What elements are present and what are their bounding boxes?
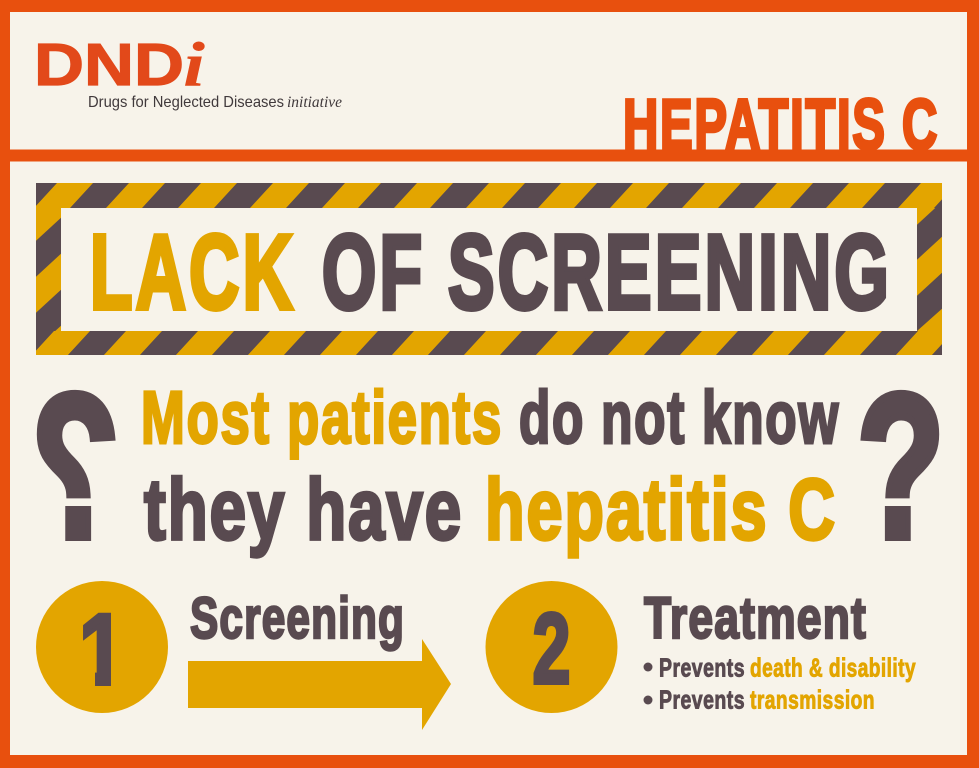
step 2 circle: [486, 581, 618, 713]
logo wordmark: [34, 28, 205, 100]
step 1 circle: [36, 581, 168, 713]
bullet: prevents transmission: transmission: [750, 684, 875, 714]
bullet: prevents transmission: Prevents: [659, 684, 745, 714]
step 2 label: Treatment: Treatment: [644, 586, 867, 651]
statement line 1: do not know: [519, 376, 840, 459]
arrow: [188, 639, 451, 730]
statement line 2: [144, 462, 837, 558]
logo tagline: Drugs for Neglected Diseases: [88, 94, 284, 111]
bullet: prevents transmission: [644, 684, 875, 714]
bullet: prevents death and disability: Prevents: [659, 652, 745, 682]
banner title: LACK OF SCREENING: [90, 214, 892, 332]
statement line 1: Most patients: [141, 376, 503, 459]
step 2 circle: 2: [532, 593, 570, 705]
statement line 2: they have: [144, 462, 463, 558]
logo wordmark: DND: [34, 32, 184, 98]
bullet: prevents death and disability: death & disability: [750, 652, 916, 682]
right question mark: ?: [857, 353, 945, 581]
banner title: LACK OF SCREENING: LACK: [90, 214, 296, 332]
logo tagline: initiative: [287, 94, 342, 111]
step 1 label: Screening: Screening: [190, 586, 405, 651]
logo: DNDi: [34, 28, 342, 111]
step 1 circle: 1: [79, 593, 125, 707]
banner: hazard-striped frame: [36, 183, 942, 355]
logo wordmark: i: [183, 28, 205, 100]
bullet: prevents death and disability: [644, 652, 916, 682]
left question mark: ?: [31, 353, 119, 581]
statement line 2: hepatitis C: [485, 462, 837, 558]
